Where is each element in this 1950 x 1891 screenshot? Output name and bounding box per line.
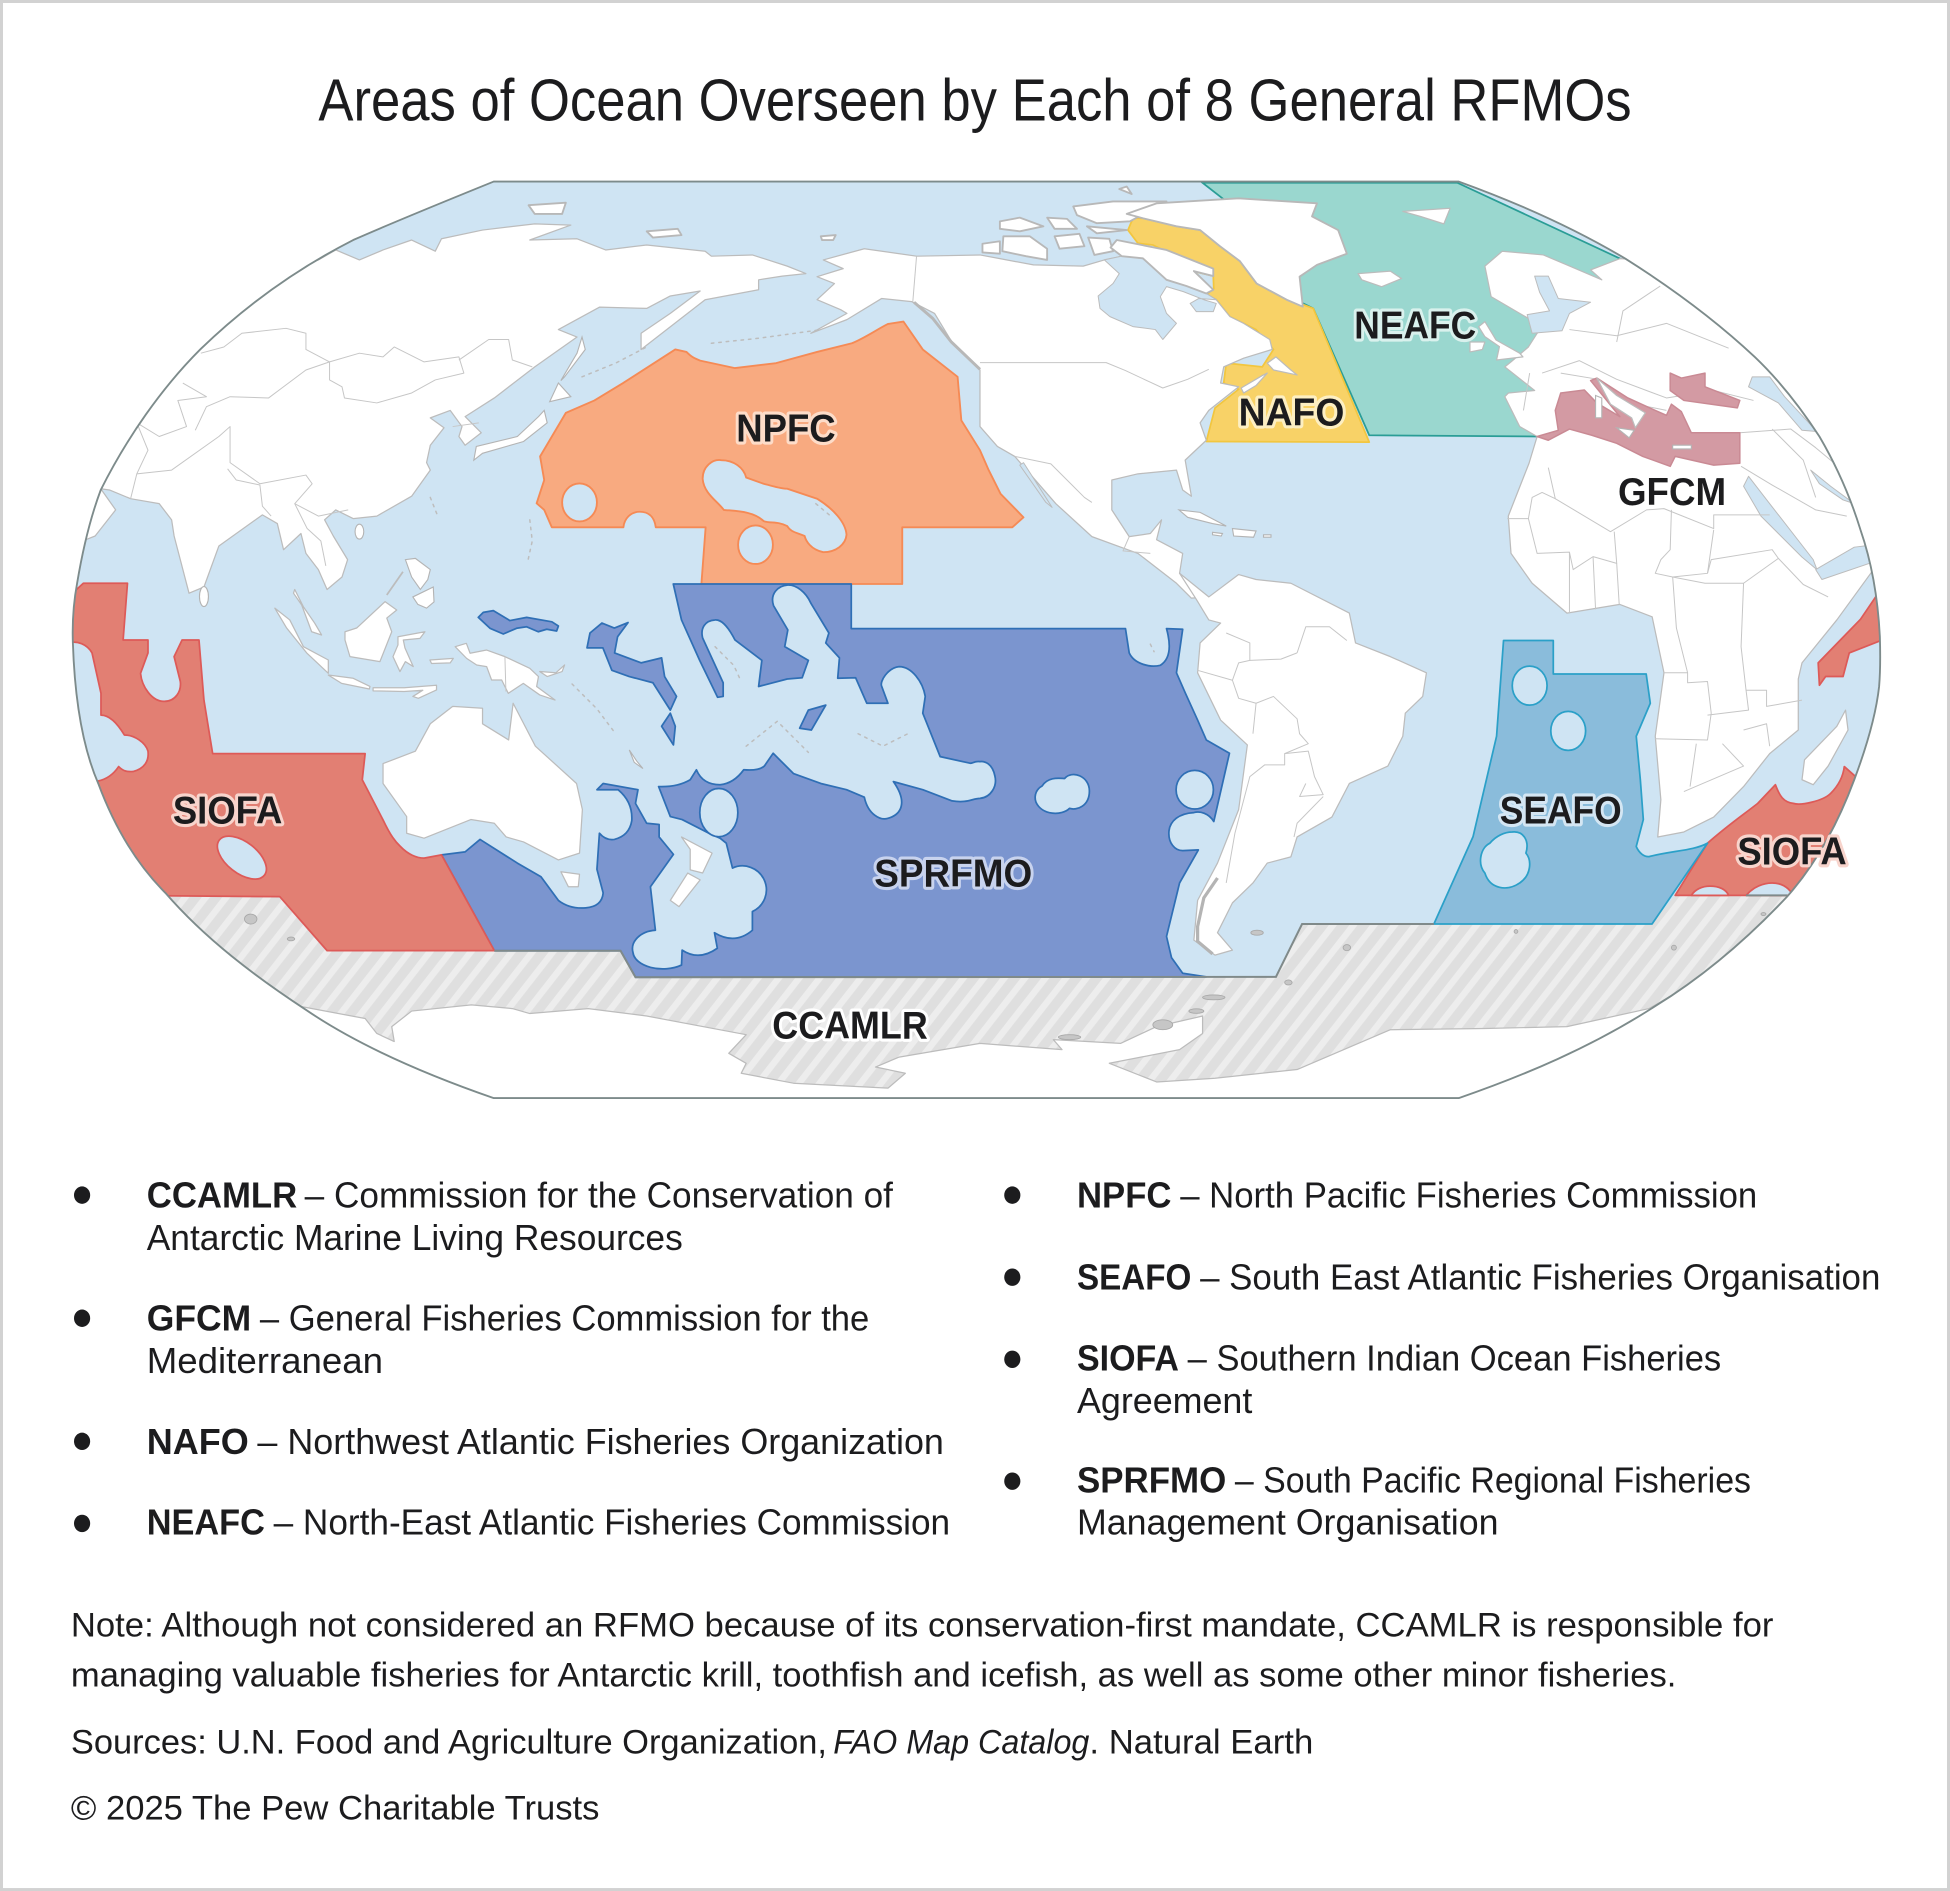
legend item: SPRFMO: Management Organisation — [1077, 1502, 1499, 1543]
note text — [71, 1607, 1773, 1694]
sea: Red Sea — [1744, 476, 1817, 570]
hole: SEAFO north oval — [1512, 666, 1547, 705]
hole: double seamount — [1035, 775, 1089, 813]
sea: Caspian — [1749, 377, 1817, 432]
land: Taiwan — [355, 524, 364, 539]
label: CCAMLR: CCAMLR — [772, 1004, 928, 1047]
legend item: GFCM: Mediterranean — [147, 1340, 383, 1381]
region: SIOFA east lower — [1675, 767, 1859, 895]
legend item: CCAMLR: CCAMLR — [147, 1175, 297, 1216]
islands: subantarctic specks — [244, 913, 1766, 1040]
sea: Gulf of Aden — [1816, 543, 1884, 580]
land: New Zealand south — [670, 873, 700, 907]
land: Hudson Bay and Hudson Strait — [1098, 256, 1216, 340]
sea: Persian Gulf — [1811, 470, 1854, 504]
land: Hokkaido — [550, 383, 571, 402]
legend item: CCAMLR: Antarctic Marine Living Resources — [147, 1217, 683, 1258]
land: Mindanao — [413, 587, 434, 608]
land: United Kingdom — [1479, 322, 1523, 360]
legend item: NEAFC: NEAFC — [147, 1502, 265, 1543]
label: SEAFO: SEAFO — [1500, 789, 1622, 832]
land: North America — [811, 249, 1272, 598]
land: Sicily — [1617, 428, 1634, 438]
label: SIOFA west: SIOFA — [173, 789, 282, 832]
land: Java — [328, 675, 370, 689]
land: New Caledonia — [629, 750, 643, 769]
land: Sakhalin — [561, 337, 585, 381]
land: Italy — [1597, 378, 1645, 428]
SPRFMO piece: Solomon pocket — [587, 623, 677, 710]
land: Antarctica — [286, 995, 1673, 1113]
legend item: NEAFC: – North-East Atlantic Fisheries Commission — [274, 1502, 950, 1543]
GFCM: Black Sea — [1670, 373, 1740, 408]
sea: Baltic — [1527, 276, 1591, 333]
land: Arctic islands — [529, 187, 1167, 260]
land: North American borders — [913, 256, 1209, 553]
hole: NPFC seamount west — [562, 483, 597, 521]
region: SPRFMO — [441, 584, 1229, 977]
hole: SIOFA east lobe right — [1746, 883, 1793, 895]
land: New Guinea — [455, 643, 555, 700]
land: Nova Scotia — [1241, 373, 1267, 393]
legend item: NAFO: – Northwest Atlantic Fisheries Organization — [257, 1421, 944, 1462]
map outline — [73, 182, 1880, 1098]
legend item: SPRFMO — [1004, 1459, 1751, 1543]
hole: NPFC seamount south — [738, 525, 773, 564]
hole: SEAFO middle oval — [1551, 711, 1586, 750]
copyright: © 2025 The Pew Charitable Trusts — [71, 1789, 599, 1827]
hole: SIOFA west oval — [216, 835, 268, 880]
label: GFCM: GFCM — [1618, 471, 1726, 514]
sources: Sources: U.N. Food and Agriculture Organization, — [71, 1724, 827, 1762]
CCAMLR boundary line — [494, 895, 1787, 977]
land: Asia — [62, 224, 806, 593]
legend item: GFCM — [74, 1298, 869, 1381]
note text: managing valuable fisheries for Antarctic krill, toothfish and icefish, as well as some other minor fisheries. — [71, 1656, 1676, 1694]
legend item: NPFC: NPFC — [1077, 1175, 1171, 1216]
legend item: GFCM: GFCM — [147, 1298, 251, 1339]
legend item: SEAFO: SEAFO — [1077, 1257, 1191, 1298]
land: Europe, Africa and Middle East — [1485, 251, 1903, 837]
land: Gulf of California — [1020, 463, 1052, 507]
islands: Pacific island specks — [430, 330, 1154, 752]
note text: Note: Although not considered an RFMO because of its conservation-first mandate, CCAMLR is responsible for — [71, 1607, 1773, 1645]
land: British Columbia fjords — [914, 302, 980, 369]
label: NAFO: NAFO — [1239, 391, 1344, 434]
legend item: SIOFA: SIOFA — [1077, 1337, 1179, 1378]
label: NEAFC: NEAFC — [1354, 304, 1476, 347]
legend item: SIOFA — [1004, 1337, 1721, 1421]
land: South American borders — [1198, 627, 1347, 883]
legend item: SPRFMO: SPRFMO — [1077, 1459, 1226, 1500]
region: CCAMLR hatched area — [170, 896, 1786, 1088]
land: Europe and Africa borders — [1507, 286, 1853, 792]
land: Palawan — [387, 572, 403, 595]
label: NPFC: NPFC — [736, 407, 836, 450]
land: Chilean fjords — [1198, 878, 1218, 954]
region: SIOFA east upper — [1817, 596, 1880, 686]
hole: SIOFA east lobe left — [1691, 886, 1729, 895]
region: NAFO — [1128, 218, 1369, 442]
land: Greenland — [1127, 198, 1347, 307]
land: Borneo — [345, 602, 397, 662]
legend item: NPFC: – North Pacific Fisheries Commission — [1180, 1175, 1757, 1216]
land: South America — [1180, 573, 1426, 955]
sources: . Natural Earth — [1089, 1724, 1313, 1762]
land: Arabia west tip — [86, 490, 116, 540]
land: Sardinia and Corsica — [1596, 395, 1602, 418]
legend item: CCAMLR: – Commission for the Conservation of — [305, 1175, 894, 1216]
label: SPRFMO: SPRFMO — [874, 853, 1032, 896]
region: SIOFA west — [68, 583, 1884, 951]
land: Australia — [383, 703, 582, 860]
legend item: NAFO: NAFO — [147, 1421, 249, 1462]
land: Lesser Sunda islands — [373, 685, 437, 698]
legend item: SPRFMO: – South Pacific Regional Fisheries — [1235, 1459, 1751, 1500]
land: New Zealand north — [682, 837, 712, 873]
hole: Hawaii EEZ — [703, 460, 847, 552]
title: Areas of Ocean Overseen by Each of 8 General RFMOs — [318, 67, 1632, 134]
land: Sri Lanka — [199, 587, 208, 607]
legend item: SIOFA: Agreement — [1077, 1380, 1252, 1421]
sources — [71, 1724, 1313, 1762]
sources: FAO Map Catalog — [833, 1724, 1089, 1762]
land: Crete — [1673, 445, 1691, 449]
land: Malay peninsula — [293, 589, 322, 635]
label: SIOFA east: SIOFA — [1737, 830, 1847, 873]
legend item: SEAFO: – South East Atlantic Fisheries Organisation — [1200, 1257, 1880, 1298]
SPRFMO piece: Vanuatu sliver — [662, 713, 675, 745]
region: NPFC — [537, 322, 1024, 584]
legend item: SIOFA: – Southern Indian Ocean Fisheries — [1188, 1337, 1721, 1378]
land: Madagascar — [1802, 710, 1848, 785]
land: Newfoundland — [1267, 357, 1297, 375]
legend: left column — [74, 1175, 950, 1543]
land: Caribbean islands — [1179, 510, 1271, 537]
region: GFCM — [1537, 373, 1740, 466]
ocean background — [74, 182, 1880, 976]
land: New Britain — [540, 665, 565, 677]
land: Svalbard — [1403, 208, 1450, 224]
hole: Tristan da Cunha EEZ — [1481, 832, 1530, 888]
region: SEAFO — [1434, 640, 1707, 924]
hole: Juan Fernandez oval — [1176, 770, 1213, 809]
land: Honshu — [474, 410, 547, 460]
region: NEAFC — [1203, 183, 1623, 437]
legend: right column — [1004, 1175, 1880, 1543]
land: Iceland — [1358, 271, 1402, 287]
land: Luzon — [405, 558, 430, 589]
land: Ireland — [1470, 342, 1485, 352]
land: New Guinea border — [504, 657, 507, 691]
land: Tasmania — [561, 872, 580, 887]
world map — [62, 174, 1903, 1113]
hole: Lord Howe oval — [700, 788, 738, 837]
land: Baffin Island — [1111, 240, 1213, 293]
land: Sulawesi — [393, 632, 425, 672]
land: Asian borders — [131, 328, 532, 566]
land: Ceram and Moluccas — [430, 658, 453, 663]
land: Sumatra — [275, 608, 328, 673]
SPRFMO piece: Samoa sliver — [800, 705, 826, 730]
legend item: GFCM: – General Fisheries Commission for the — [260, 1298, 869, 1339]
legend item: CCAMLR — [74, 1175, 894, 1258]
SPRFMO piece: Micronesia strip — [478, 611, 558, 634]
